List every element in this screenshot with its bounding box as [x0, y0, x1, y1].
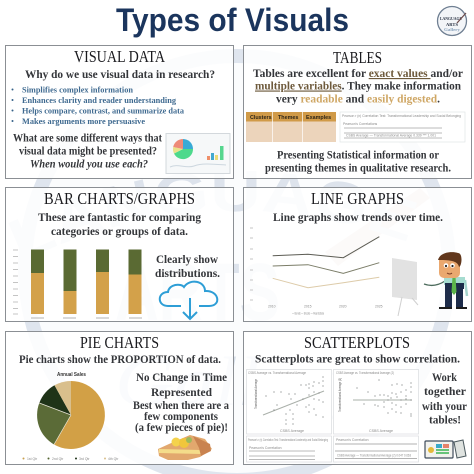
heading: pie charts: PIE CHARTS: [80, 333, 159, 352]
bar charts description: [38, 212, 201, 238]
themes table: Clusters: [250, 115, 272, 121]
distribution note: [155, 254, 220, 280]
icon: cloud download: [160, 282, 217, 319]
pie charts notes: Represented: [151, 387, 213, 399]
panel: visual data: [6, 46, 234, 178]
correlation table 1: Pearson's r (n) Correlation Test: Transformational Leadership and Social Belonging: [248, 438, 328, 442]
prompt text: When would you use each?: [30, 158, 148, 170]
scatterplot 2: CSBS Average vs. Transformational Average (2): [336, 371, 394, 375]
icon: Language Arts Gallery logo: LANGUAGE: [440, 16, 462, 21]
title: Types of Visuals: [116, 2, 349, 38]
pie charts notes: No Change in Time: [136, 372, 227, 384]
icon: Language Arts Gallery logo: Gallery: [444, 27, 460, 32]
icon: tablet and phone dashboards: [425, 440, 466, 458]
correlation table: Pearson's Correlations: [343, 122, 377, 126]
panel: pie charts: [6, 332, 234, 464]
bullet list: [12, 86, 185, 126]
tables description: [253, 68, 463, 106]
scatterplot 1: CSBS Average: [280, 429, 304, 433]
themes table: Themes: [278, 115, 298, 121]
tables note: Presenting Statistical information or: [277, 150, 439, 162]
correlation table 2: Pearson's Correlation: [336, 438, 369, 442]
correlation table: CSBS Average — Transformational Average 0.339 *** 1.001: [346, 134, 436, 138]
pie charts notes: Best when there are a: [133, 400, 229, 412]
teamwork note: Work: [432, 372, 458, 384]
bullet list: Makes arguments more persuasive: [22, 117, 145, 126]
panel: bar charts: [6, 188, 234, 322]
correlation table: Pearson r (n) Correlation Test: Transformational Leadership and Social Belonging: [342, 114, 461, 118]
scatterplot 1: Transformational Average: [254, 379, 258, 409]
icon: presenter: [424, 252, 467, 309]
correlation table 2: [334, 436, 418, 462]
tables description: multiple variables. They make information: [255, 80, 462, 92]
bar charts description: These are fantastic for comparing: [38, 212, 201, 224]
icon: data charts: [166, 134, 230, 174]
heading: bar charts: BAR CHARTS/GRAPHS: [44, 189, 195, 208]
teamwork note: with your: [422, 401, 467, 413]
correlation table: [340, 112, 465, 142]
tables description: Tables are excellent for exact values and/or: [253, 68, 463, 80]
line graphs description: Line graphs show trends over time.: [273, 212, 443, 224]
icon: Language Arts Gallery logo: [438, 6, 466, 36]
teamwork note: [422, 372, 467, 426]
themes table: Examples: [306, 115, 331, 121]
watermark background: ARTS: [115, 247, 280, 338]
tables note: [265, 150, 451, 174]
panel: tables: [244, 46, 472, 178]
line chart: [250, 228, 383, 316]
icon: Language Arts Gallery logo: ARTS: [446, 22, 459, 27]
distribution note: Clearly show: [156, 254, 219, 266]
watermark background: Gallery: [115, 344, 366, 421]
icon: presentation easel: [392, 258, 418, 316]
tables description: very readable and easily digested.: [276, 94, 440, 106]
line chart: 2010: [268, 304, 276, 308]
pie chart: [22, 372, 119, 461]
correlation table 1: Pearson's Correlation: [249, 446, 282, 450]
prompt text: visual data might be presented?: [19, 146, 157, 158]
pie charts description: Pie charts show the PROPORTION of data.: [19, 354, 221, 366]
scatterplot 2: CSBS Average: [369, 429, 393, 433]
pie chart: 2nd Qtr: [52, 457, 64, 461]
pie charts notes: few components: [144, 411, 218, 423]
correlation table 1: [246, 436, 332, 462]
bar charts description: categories or groups of data.: [51, 226, 188, 238]
teamwork note: tables!: [429, 414, 461, 426]
heading: tables: TABLES: [333, 48, 382, 67]
pie chart: Annual Sales: [57, 372, 86, 378]
line chart: 2025: [375, 304, 383, 308]
themes table: [246, 112, 336, 142]
tables note: presenting themes in qualitative research.: [265, 162, 451, 174]
bullet list: Simplifies complex information: [22, 86, 133, 94]
distribution note: distributions.: [155, 268, 220, 280]
scatterplot 2: Transformational Average (2): [338, 378, 342, 412]
scatterplot 1: [246, 370, 332, 434]
line chart: 2020: [339, 304, 347, 308]
panel: scatterplots: [244, 332, 472, 464]
question text: Why do we use visual data in research?: [25, 69, 215, 81]
prompt text: What are some different ways that: [13, 132, 162, 144]
line chart: — Bonds — Stocks — Real Estate: [292, 312, 324, 316]
scatterplot 2: [334, 370, 418, 434]
bullet list: Helps compare, contrast, and summarize data: [22, 106, 185, 116]
heading: line graphs: LINE GRAPHS: [311, 189, 404, 208]
icon: slice of lemon pie: [158, 435, 212, 460]
bullet list: Enhances clarity and reader understanding: [22, 96, 177, 105]
line chart: 2015: [304, 304, 312, 308]
heading: visual data: VISUAL DATA: [74, 47, 165, 66]
teamwork note: together: [424, 386, 466, 398]
panel: line graphs: [244, 188, 472, 322]
pie chart: 4th Qtr: [108, 457, 119, 461]
correlation table 2: CSBS Average — Transformational Average (2) 0.047 0.663: [337, 454, 411, 458]
pie chart: 1st Qtr: [27, 457, 38, 461]
watermark background: LANGUAGE: [110, 179, 358, 212]
stacked bar chart: [13, 250, 142, 318]
pie charts notes: [133, 372, 229, 434]
scatterplot 1: CSBS Average vs. Transformational Average: [248, 371, 306, 375]
prompt text: [13, 132, 162, 170]
scatterplots description: Scatterplots are great to show correlation.: [255, 354, 460, 366]
pie chart: 3rd Qtr: [79, 457, 90, 461]
heading: scatterplots: SCATTERPLOTS: [304, 333, 410, 352]
pie charts notes: (a few pieces of pie)!: [135, 422, 228, 434]
